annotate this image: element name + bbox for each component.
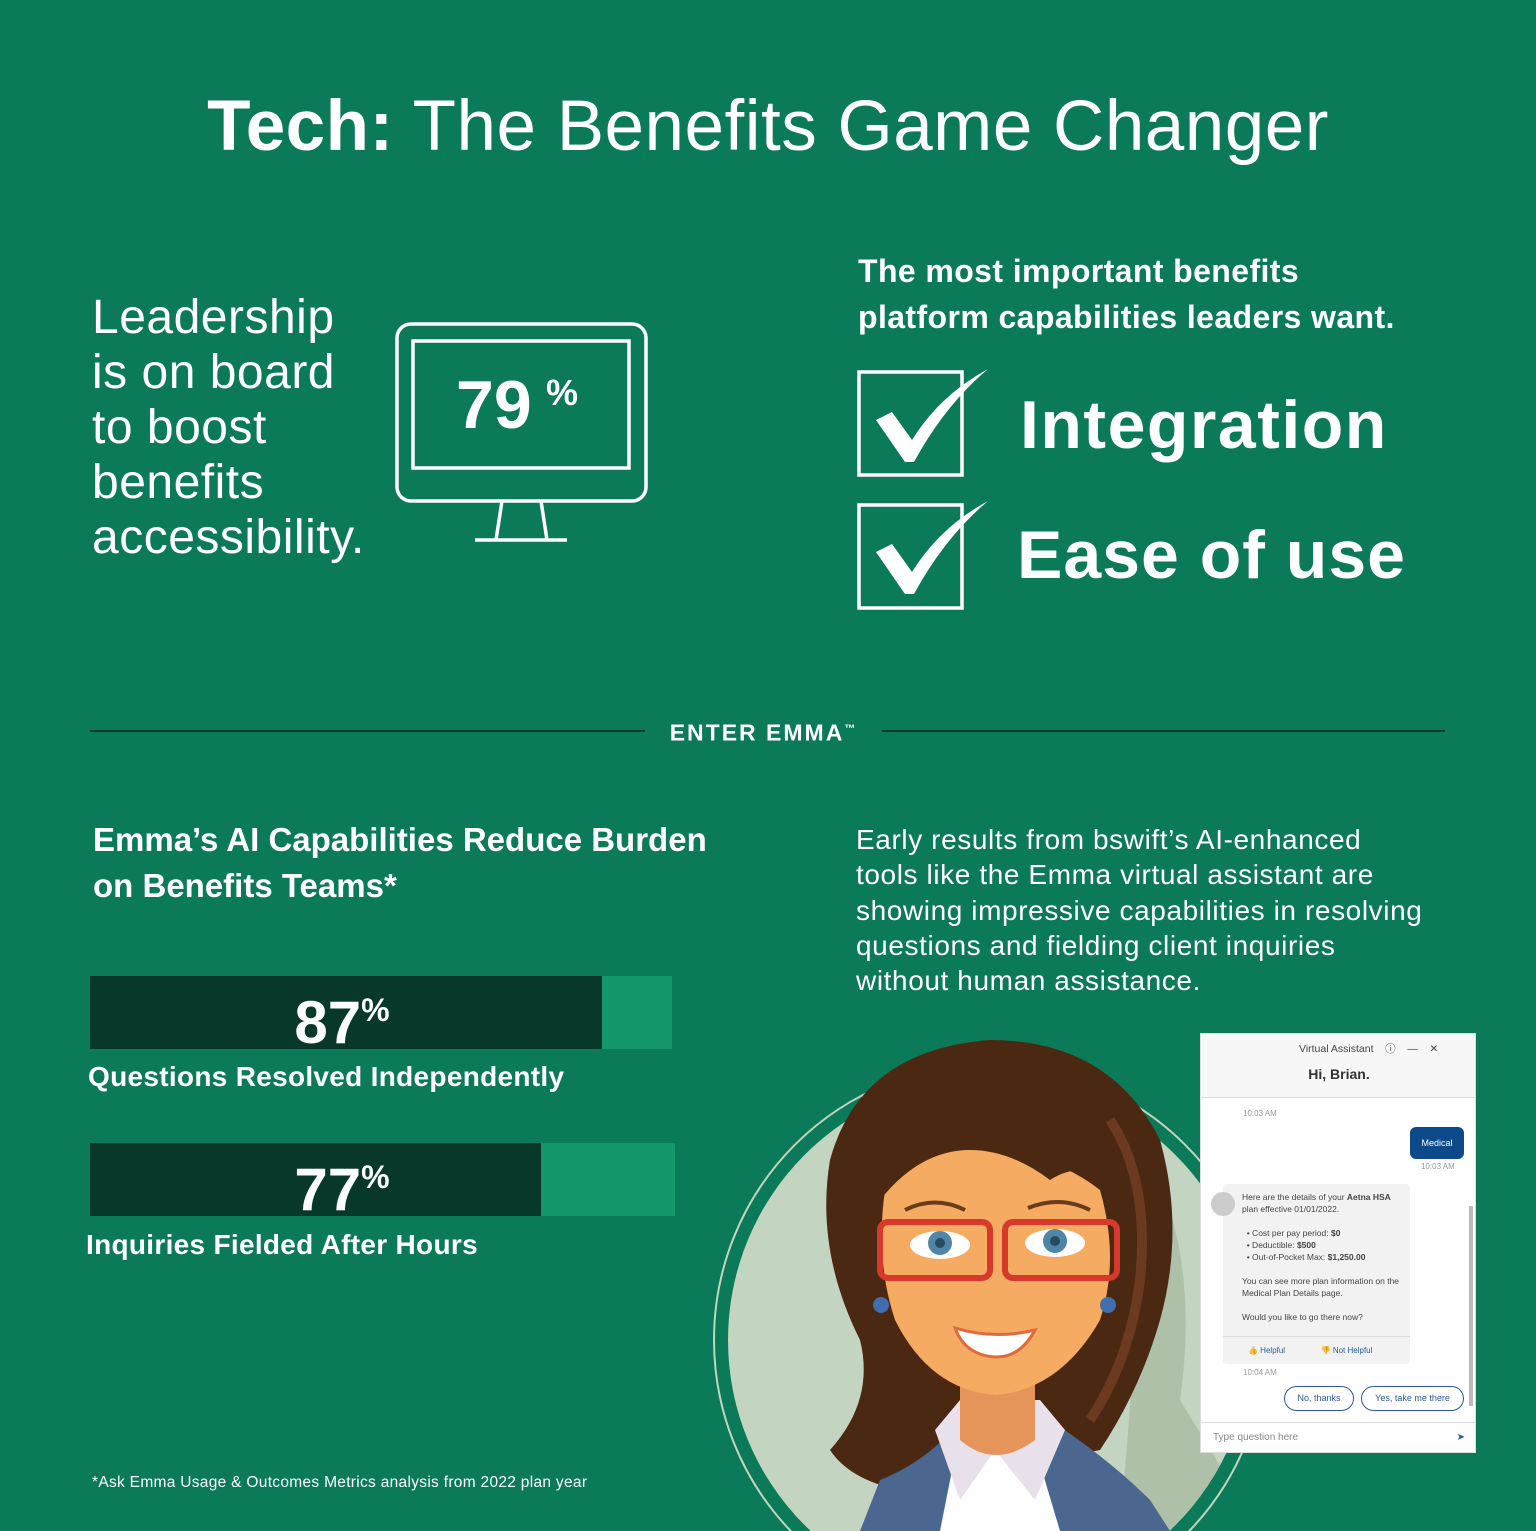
icon: checkbox 2 — [857, 501, 988, 610]
bar chart: 77%: 77% — [294, 1156, 390, 1223]
capability: Ease of use: Ease of use — [1017, 517, 1406, 593]
text block: leadership: accessibility. — [92, 511, 365, 564]
icon: monitor with 79%: % — [546, 372, 578, 413]
text block: early results: without human assistance. — [856, 965, 1201, 996]
label: inquiries fielded: Inquiries Fielded After Hours — [86, 1229, 478, 1260]
smile — [955, 1328, 1035, 1357]
heading: capabilities: platform capabilities leaders want. — [858, 299, 1395, 335]
chat buttons — [1284, 1386, 1354, 1411]
chat input — [1201, 1422, 1477, 1454]
eyes — [910, 1231, 970, 1259]
capability: Integration: Integration — [1020, 387, 1388, 463]
hair back — [826, 1040, 1172, 1490]
glasses — [880, 1222, 990, 1278]
chat header: Hi, Brian. — [1308, 1066, 1370, 1082]
title: Tech: The Benefits Game Changer — [207, 87, 1329, 166]
bot message: Would you like to go there now? — [1242, 1312, 1363, 1322]
text block: leadership — [92, 291, 365, 564]
text block: early results: Early results from bswift’s AI-enhanced — [856, 824, 1361, 855]
chat input: ➤ — [1457, 1432, 1465, 1443]
text block: early results — [856, 824, 1422, 996]
chat header — [1201, 1034, 1477, 1098]
icon: monitor with 79%: 79 — [456, 367, 532, 443]
footnote: *Ask Emma Usage & Outcomes Metrics analysis from 2022 plan year — [92, 1474, 587, 1491]
fringe — [880, 1100, 1120, 1200]
chat input: Type question here — [1213, 1432, 1298, 1443]
bar chart: 77% — [90, 1143, 675, 1216]
illustration: Emma avatar — [713, 1040, 1243, 1531]
text block: leadership: is on board — [92, 346, 335, 399]
text block: early results: questions and fielding client inquiries — [856, 930, 1335, 961]
chat header: Virtual Assistant ⓘ — ✕ — [1299, 1043, 1438, 1055]
heading: capabilities: The most important benefits — [858, 253, 1299, 289]
bot message — [1223, 1184, 1410, 1364]
bot message: You can see more plan information on the Medical Plan Details page. — [1242, 1276, 1399, 1298]
face — [882, 1145, 1110, 1395]
chat widget: 10:04 AM — [1243, 1368, 1277, 1377]
bot message: Here are the details of your Aetna HSA plan effective 01/01/2022. — [1242, 1192, 1391, 1214]
bar chart: 87% — [90, 976, 672, 1049]
bot message: 👍 Helpful 👎 Not Helpful — [1248, 1346, 1372, 1355]
text block: early results: showing impressive capabilities in resolving — [856, 895, 1422, 926]
chat widget: 10:03 AM — [1243, 1109, 1277, 1118]
icon: checkbox 1 — [857, 369, 988, 477]
text block: leadership: Leadership — [92, 291, 335, 344]
bar chart: 87%: 87% — [294, 989, 390, 1056]
heading: capabilities — [858, 253, 1395, 335]
chat widget: 10:03 AM — [1421, 1162, 1455, 1171]
chat buttons: No, thanks — [1297, 1393, 1341, 1403]
label: questions resolved: Questions Resolved Independently — [88, 1061, 564, 1092]
text block: leadership: benefits — [92, 456, 264, 509]
bot message: • Deductible: $500 — [1247, 1240, 1316, 1250]
bot message: • Cost per pay period: $0 — [1247, 1228, 1340, 1238]
heading: AI capabilities: on Benefits Teams* — [93, 867, 397, 904]
bot message: • Out-of-Pocket Max: $1,250.00 — [1247, 1252, 1365, 1262]
section heading: enter emma: ENTER EMMA™ — [670, 720, 857, 746]
user message — [1410, 1127, 1464, 1159]
suit — [860, 1420, 1170, 1531]
user message: Medical — [1421, 1138, 1452, 1148]
text block: early results: tools like the Emma virtual assistant are — [856, 859, 1374, 890]
heading: AI capabilities — [93, 821, 707, 904]
chat widget: Yes, take me there — [1375, 1393, 1450, 1403]
neck — [960, 1360, 1035, 1455]
heading: AI capabilities: Emma’s AI Capabilities Reduce Burden — [93, 821, 707, 858]
text block: leadership: to boost — [92, 401, 267, 454]
chat widget — [1200, 1033, 1476, 1453]
icon: monitor with 79% — [395, 322, 648, 542]
